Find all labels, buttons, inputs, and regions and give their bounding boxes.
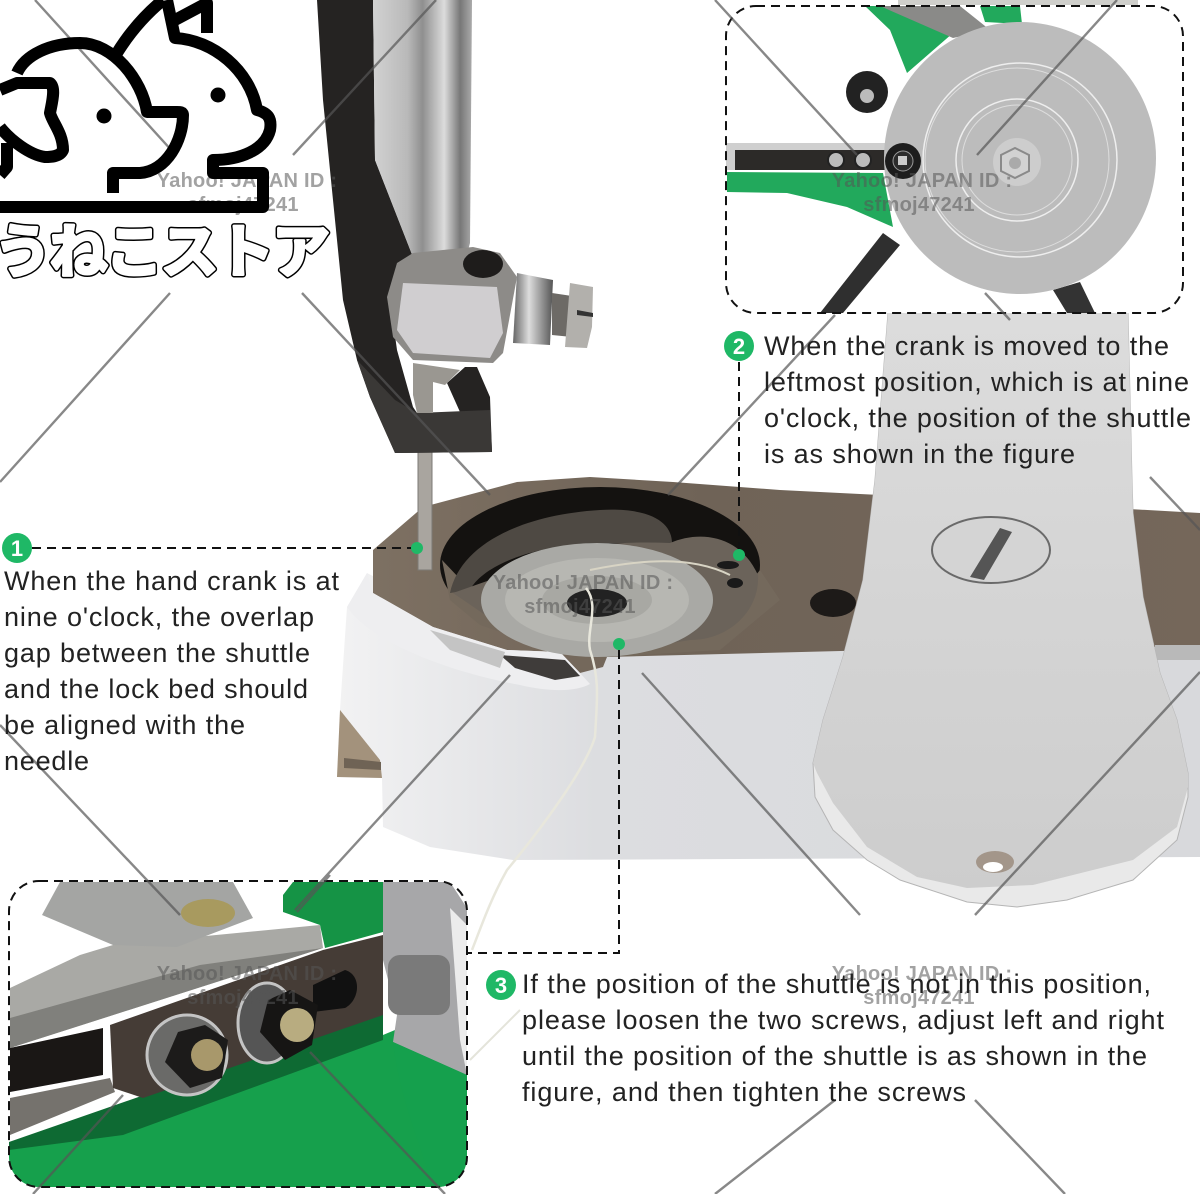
photo: thread (470, 561, 730, 1060)
text block: step 3 (522, 969, 1164, 1107)
photo: large silver arm (813, 313, 1188, 907)
text block: step 1: nine o'clock, the overlap (4, 602, 314, 632)
leader line: callout 1 (32, 542, 423, 554)
badge: number 1: 1 (11, 536, 23, 561)
inset: adjustment screws detail (bottom left) (9, 881, 467, 1187)
watermark: Yahoo ID stamps (157, 170, 1012, 1009)
photo: shuttle race and bobbin (440, 487, 780, 657)
text block: step 3: If the position of the shuttle is not in this position, (522, 969, 1151, 999)
badge: number 2 (724, 331, 754, 361)
watermark: Yahoo ID stamps: sfmoj47241 (863, 194, 975, 216)
text block: step 1 (4, 566, 339, 776)
badge: number 1 (2, 533, 32, 563)
text block: step 2: When the crank is moved to the (764, 331, 1169, 361)
text block: step 3: figure, and then tighten the screws (522, 1077, 966, 1107)
watermark: Yahoo ID stamps: Yahoo! JAPAN ID : (493, 572, 673, 594)
photo: steel needle bar (373, 0, 472, 280)
watermark: Yahoo ID stamps: Yahoo! JAPAN ID : (832, 963, 1012, 985)
inset: disc and crank detail (top right) (726, 0, 1183, 313)
text block: step 3: until the position of the shuttle is as shown in the (522, 1041, 1147, 1071)
badge: number 2: 2 (733, 334, 745, 359)
logo: dog and cat outline (0, 0, 270, 207)
logo: store name: うねこストア (0, 205, 330, 289)
photo: silver chamfer edge (347, 573, 590, 690)
photo: dark sewing arm (317, 0, 492, 453)
text block: step 2: o'clock, the position of the shuttle (764, 403, 1191, 433)
badge: number 3: 3 (495, 973, 507, 998)
photo: machine bed plate (373, 477, 1200, 673)
badge: number 3 (486, 970, 516, 1000)
logo: store name: うねこストア (0, 205, 330, 289)
watermark: Yahoo ID stamps: sfmoj47241 (187, 987, 299, 1009)
watermark: Yahoo ID stamps: sfmoj47241 (863, 987, 975, 1009)
text block: step 2 (764, 331, 1191, 469)
text block: step 1: needle (4, 746, 89, 776)
text block: step 1: and the lock bed should (4, 674, 308, 704)
watermark: Yahoo ID stamps: sfmoj47241 (524, 596, 636, 618)
text block: step 1: When the hand crank is at (4, 566, 339, 596)
photo: needle (418, 440, 432, 570)
watermark: Yahoo ID stamps: Yahoo! JAPAN ID : (832, 170, 1012, 192)
watermark: Yahoo ID stamps: sfmoj47241 (187, 194, 299, 216)
inset border: top (726, 6, 1183, 313)
text block: step 2: leftmost position, which is at nine (764, 367, 1189, 397)
leader line: callout 3 (467, 638, 625, 953)
photo: white machine base (337, 573, 1200, 860)
text block: step 2: is as shown in the figure (764, 439, 1075, 469)
watermark: Yahoo ID stamps: Yahoo! JAPAN ID : (157, 170, 337, 192)
watermark: Yahoo ID stamps: Yahoo! JAPAN ID : (157, 963, 337, 985)
text block: step 3: please loosen the two screws, adjust left and right (522, 1005, 1164, 1035)
leader line: callout 2 (733, 362, 745, 561)
text block: step 1: gap between the shuttle (4, 638, 310, 668)
photo: chrome clamp and screw (387, 247, 593, 413)
inset border: bottom (9, 881, 467, 1187)
text block: step 1: be aligned with the (4, 710, 245, 740)
